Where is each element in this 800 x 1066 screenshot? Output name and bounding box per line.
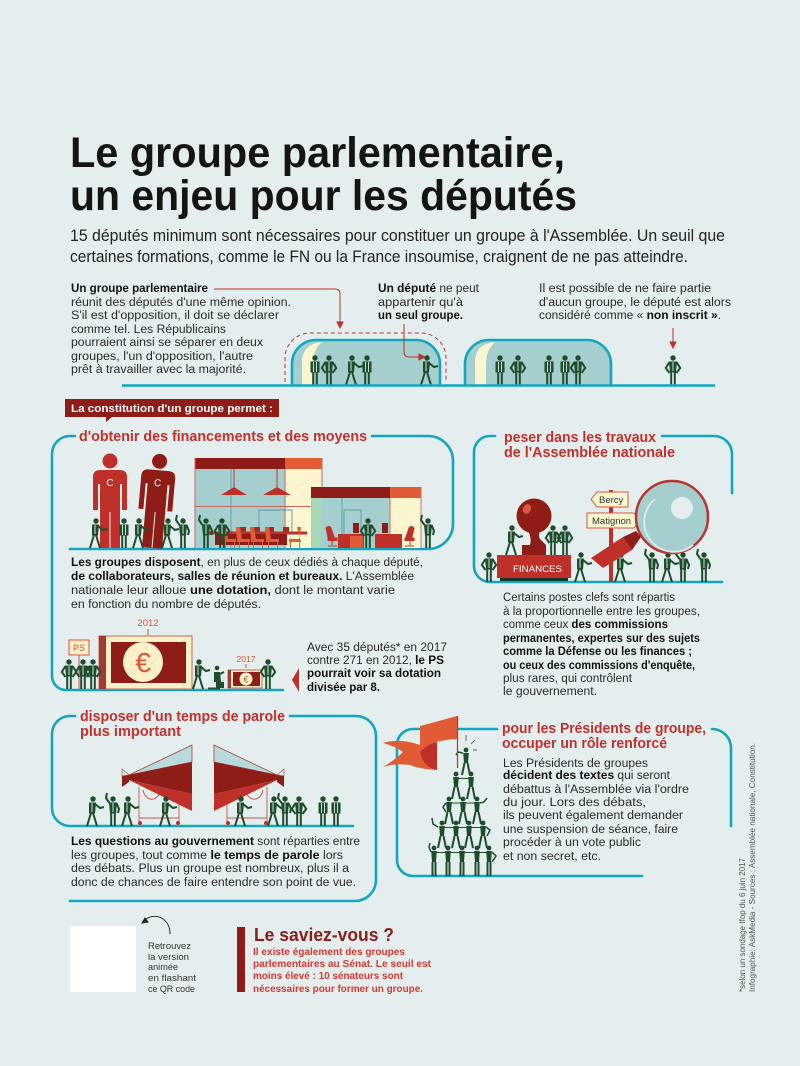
icon: right megaphone	[214, 745, 284, 825]
text: definition of a group: groupes, l'un d'opposition, l'autre	[71, 351, 253, 363]
icon: stamp finances	[497, 498, 571, 581]
text: definition of a group: Un groupe parlementaire	[71, 283, 208, 295]
icon: banknote 2017: €	[243, 674, 249, 686]
icon: banknote 2012: €	[135, 647, 151, 678]
text: presidents role: une suspension de séance, faire	[503, 824, 678, 836]
credits: Infographie: AskMedia - Sources : Assemblée nationale, Constitution.	[748, 743, 757, 992]
panel outline	[52, 716, 376, 901]
title: un enjeu pour les députés	[70, 172, 577, 220]
heading	[502, 721, 706, 752]
text: PS dotation	[307, 642, 447, 694]
text: key positions: permanentes, expertes sur des sujets	[503, 633, 700, 645]
panel: Présidents de groupe	[383, 716, 731, 876]
subtitle: 15 députés minimum sont nécessaires pour constituer un groupe à l'Assemblée. Un seuil que	[70, 226, 725, 245]
credits	[738, 743, 757, 992]
text: presidents role: débattus à l'Assemblée via l'ordre	[503, 784, 689, 796]
text: presidents role: Les Présidents de groupes	[503, 758, 648, 770]
text: one group only: Un député ne peut	[378, 283, 480, 295]
text: senate: parlementaires au Sénat. Le seuil est	[253, 959, 432, 970]
text: one group only: appartenir qu'à	[378, 297, 464, 309]
heading: disposer d'un temps de parole	[80, 709, 285, 725]
icon: collaborators: C	[106, 478, 114, 489]
text: presidents role: et non secret, etc.	[503, 851, 601, 863]
text: key positions: plus rares, qui contrôlent	[503, 673, 633, 685]
icon: stamp finances: FINANCES	[513, 564, 562, 575]
text: QR caption: Retrouvez	[148, 941, 191, 951]
icon: banknote 2017	[208, 654, 275, 689]
text: presidents role	[503, 758, 689, 863]
text: key positions	[503, 592, 700, 698]
icon: collaborators: C	[154, 478, 162, 490]
text: presidents role: du jour. Lors des débats,	[503, 797, 646, 809]
icon: collaborators	[93, 452, 177, 549]
icon: banknote 2017: 2017	[237, 654, 256, 664]
icon: meeting room building	[195, 458, 322, 548]
text: groups resources: Les groupes disposent , en plus de ceux dédiés à chaque député,	[71, 557, 423, 569]
panel: financements	[52, 429, 453, 694]
text: key positions: Certains postes clefs sont répartis	[503, 592, 675, 604]
text: presidents role: décident des textes qui seront	[503, 770, 671, 782]
panel: temps de parole	[52, 709, 376, 901]
arrow: to non inscrit	[670, 328, 676, 348]
text: QR caption: la version	[148, 952, 189, 962]
text: QR caption	[148, 941, 197, 994]
text: QR caption: en flashant	[148, 973, 197, 983]
arrow: to deputy	[404, 324, 425, 360]
panel outline	[397, 729, 731, 876]
credits: *selon un sondage Ifop du 6 juin 2017	[738, 857, 747, 992]
panel outline	[474, 436, 732, 582]
icon: banknote 2012	[99, 618, 192, 689]
text: senate: Il existe également des groupes	[253, 947, 406, 958]
heading: Le saviez-vous ?	[254, 925, 394, 945]
heading: plus important	[80, 724, 181, 740]
QR code placeholder	[70, 926, 136, 992]
label: la constitution: La constitution d'un groupe permet :	[71, 403, 273, 415]
ground line	[122, 384, 715, 387]
heading: pour les Présidents de groupe,	[502, 721, 706, 737]
text: non inscrit: d'aucun groupe, le député est alors	[539, 297, 731, 309]
panel: le saviez-vous	[237, 925, 432, 995]
people: PS group	[62, 640, 210, 689]
text: definition of a group: S'il est d'opposition, il doit se déclarer	[71, 310, 279, 322]
deputy: non inscrit	[666, 355, 680, 385]
icon: flag	[383, 716, 458, 770]
text: definition of a group: pourraient ainsi se séparer en deux	[71, 337, 263, 349]
people: meeting room	[199, 515, 229, 548]
text: QR caption: animée	[148, 962, 178, 972]
icon: human pyramid	[429, 735, 496, 876]
text: PS dotation: contre 271 en 2012, le PS	[307, 655, 444, 667]
text: non inscrit	[539, 283, 731, 322]
text: senate: nécessaires pour former un groupe.	[253, 984, 423, 995]
text: definition of a group	[71, 283, 291, 376]
people: around megaphones	[87, 793, 340, 826]
heading: occuper un rôle renforcé	[502, 736, 667, 752]
icon: red pointer	[292, 668, 299, 692]
subtitle: certaines formations, comme le FN ou la France insoumise, craignent de ne pas atteindre.	[70, 247, 688, 266]
icon: magnifying glass	[591, 481, 708, 568]
panel outline	[52, 436, 453, 690]
text: groups resources	[71, 557, 423, 611]
text: questions au gouvernement: les groupes, tout comme le temps de parole lors	[71, 850, 343, 862]
arrow: to QR code	[142, 916, 170, 934]
icon: signpost	[587, 490, 640, 582]
text: non inscrit: Il est possible de ne faire partie	[539, 283, 711, 295]
text: key positions: à la proportionnelle entre les groupes,	[503, 606, 700, 618]
heading: d'obtenir des financements et des moyens	[79, 429, 367, 445]
icon: signpost: Bercy	[599, 495, 624, 506]
dome: second group	[465, 340, 611, 385]
title	[70, 129, 577, 220]
text: one group only	[378, 283, 480, 322]
people: PS group: PS	[73, 643, 85, 653]
heading: de l'Assemblée nationale	[504, 445, 675, 461]
icon: offices building	[311, 487, 421, 548]
text: senate	[253, 947, 432, 995]
text: PS dotation: divisée par 8.	[307, 682, 380, 694]
people: beside collaborators	[90, 515, 189, 548]
arrow: to group	[214, 289, 343, 328]
panel: travaux de l'Assemblée	[474, 430, 732, 698]
people: offices	[361, 515, 434, 548]
title: Le groupe parlementaire,	[70, 129, 565, 177]
text: groups resources: en fonction du nombre de députés.	[71, 599, 261, 611]
text: definition of a group: comme tel. Les Républicains	[71, 324, 226, 336]
text: key positions: ou ceux des commissions d'enquête,	[503, 660, 695, 672]
text: groups resources: nationale leur alloue une dotation, dont le montant varie	[71, 585, 395, 597]
text: definition of a group: réunit des députés d'une même opinion.	[71, 297, 291, 309]
heading	[80, 709, 285, 740]
text: definition of a group: prêt à travailler avec la majorité.	[71, 364, 246, 376]
text: groups resources: de collaborateurs, salles de réunion et bureaux. L'Assemblée	[71, 571, 414, 583]
icon: left megaphone	[122, 745, 192, 825]
text: questions au gouvernement: des débats. Plus un groupe est nombreux, plus il a	[71, 863, 350, 875]
text: senate: moins élevé : 10 sénateurs sont	[253, 971, 404, 982]
text: key positions: comme la Défense ou les finances ;	[503, 646, 692, 658]
icon: banknote 2012: 2012	[137, 618, 159, 629]
text: PS dotation: pourrait voir sa dotation	[307, 668, 441, 680]
text: QR caption: ce QR code	[148, 984, 195, 994]
heading	[504, 430, 675, 461]
people: carrying magnifier	[615, 549, 710, 582]
text: presidents role: ils peuvent également demander	[503, 810, 683, 822]
text: questions au gouvernement: Les questions au gouvernement sont réparties entre	[71, 836, 360, 848]
text: one group only: un seul groupe.	[378, 310, 463, 322]
text: non inscrit: considéré comme « non inscrit ».	[539, 310, 721, 322]
text: questions au gouvernement	[71, 836, 360, 889]
people: around stamp	[482, 525, 592, 582]
label: la constitution	[65, 399, 279, 422]
dome: first group	[285, 333, 446, 385]
red bar	[237, 927, 245, 992]
heading: peser dans les travaux	[504, 430, 656, 446]
text: key positions: le gouvernement.	[503, 686, 597, 698]
subtitle	[70, 226, 725, 266]
text: PS dotation: Avec 35 députés* en 2017	[307, 642, 447, 654]
icon: signpost: Matignon	[592, 516, 631, 527]
text: key positions: comme ceux des commissions	[503, 619, 668, 631]
text: presidents role: procéder à un vote public	[503, 837, 641, 849]
panel: groups diagram	[71, 283, 731, 386]
text: questions au gouvernement: donc de chances de faire entendre son point de vue.	[71, 877, 356, 889]
